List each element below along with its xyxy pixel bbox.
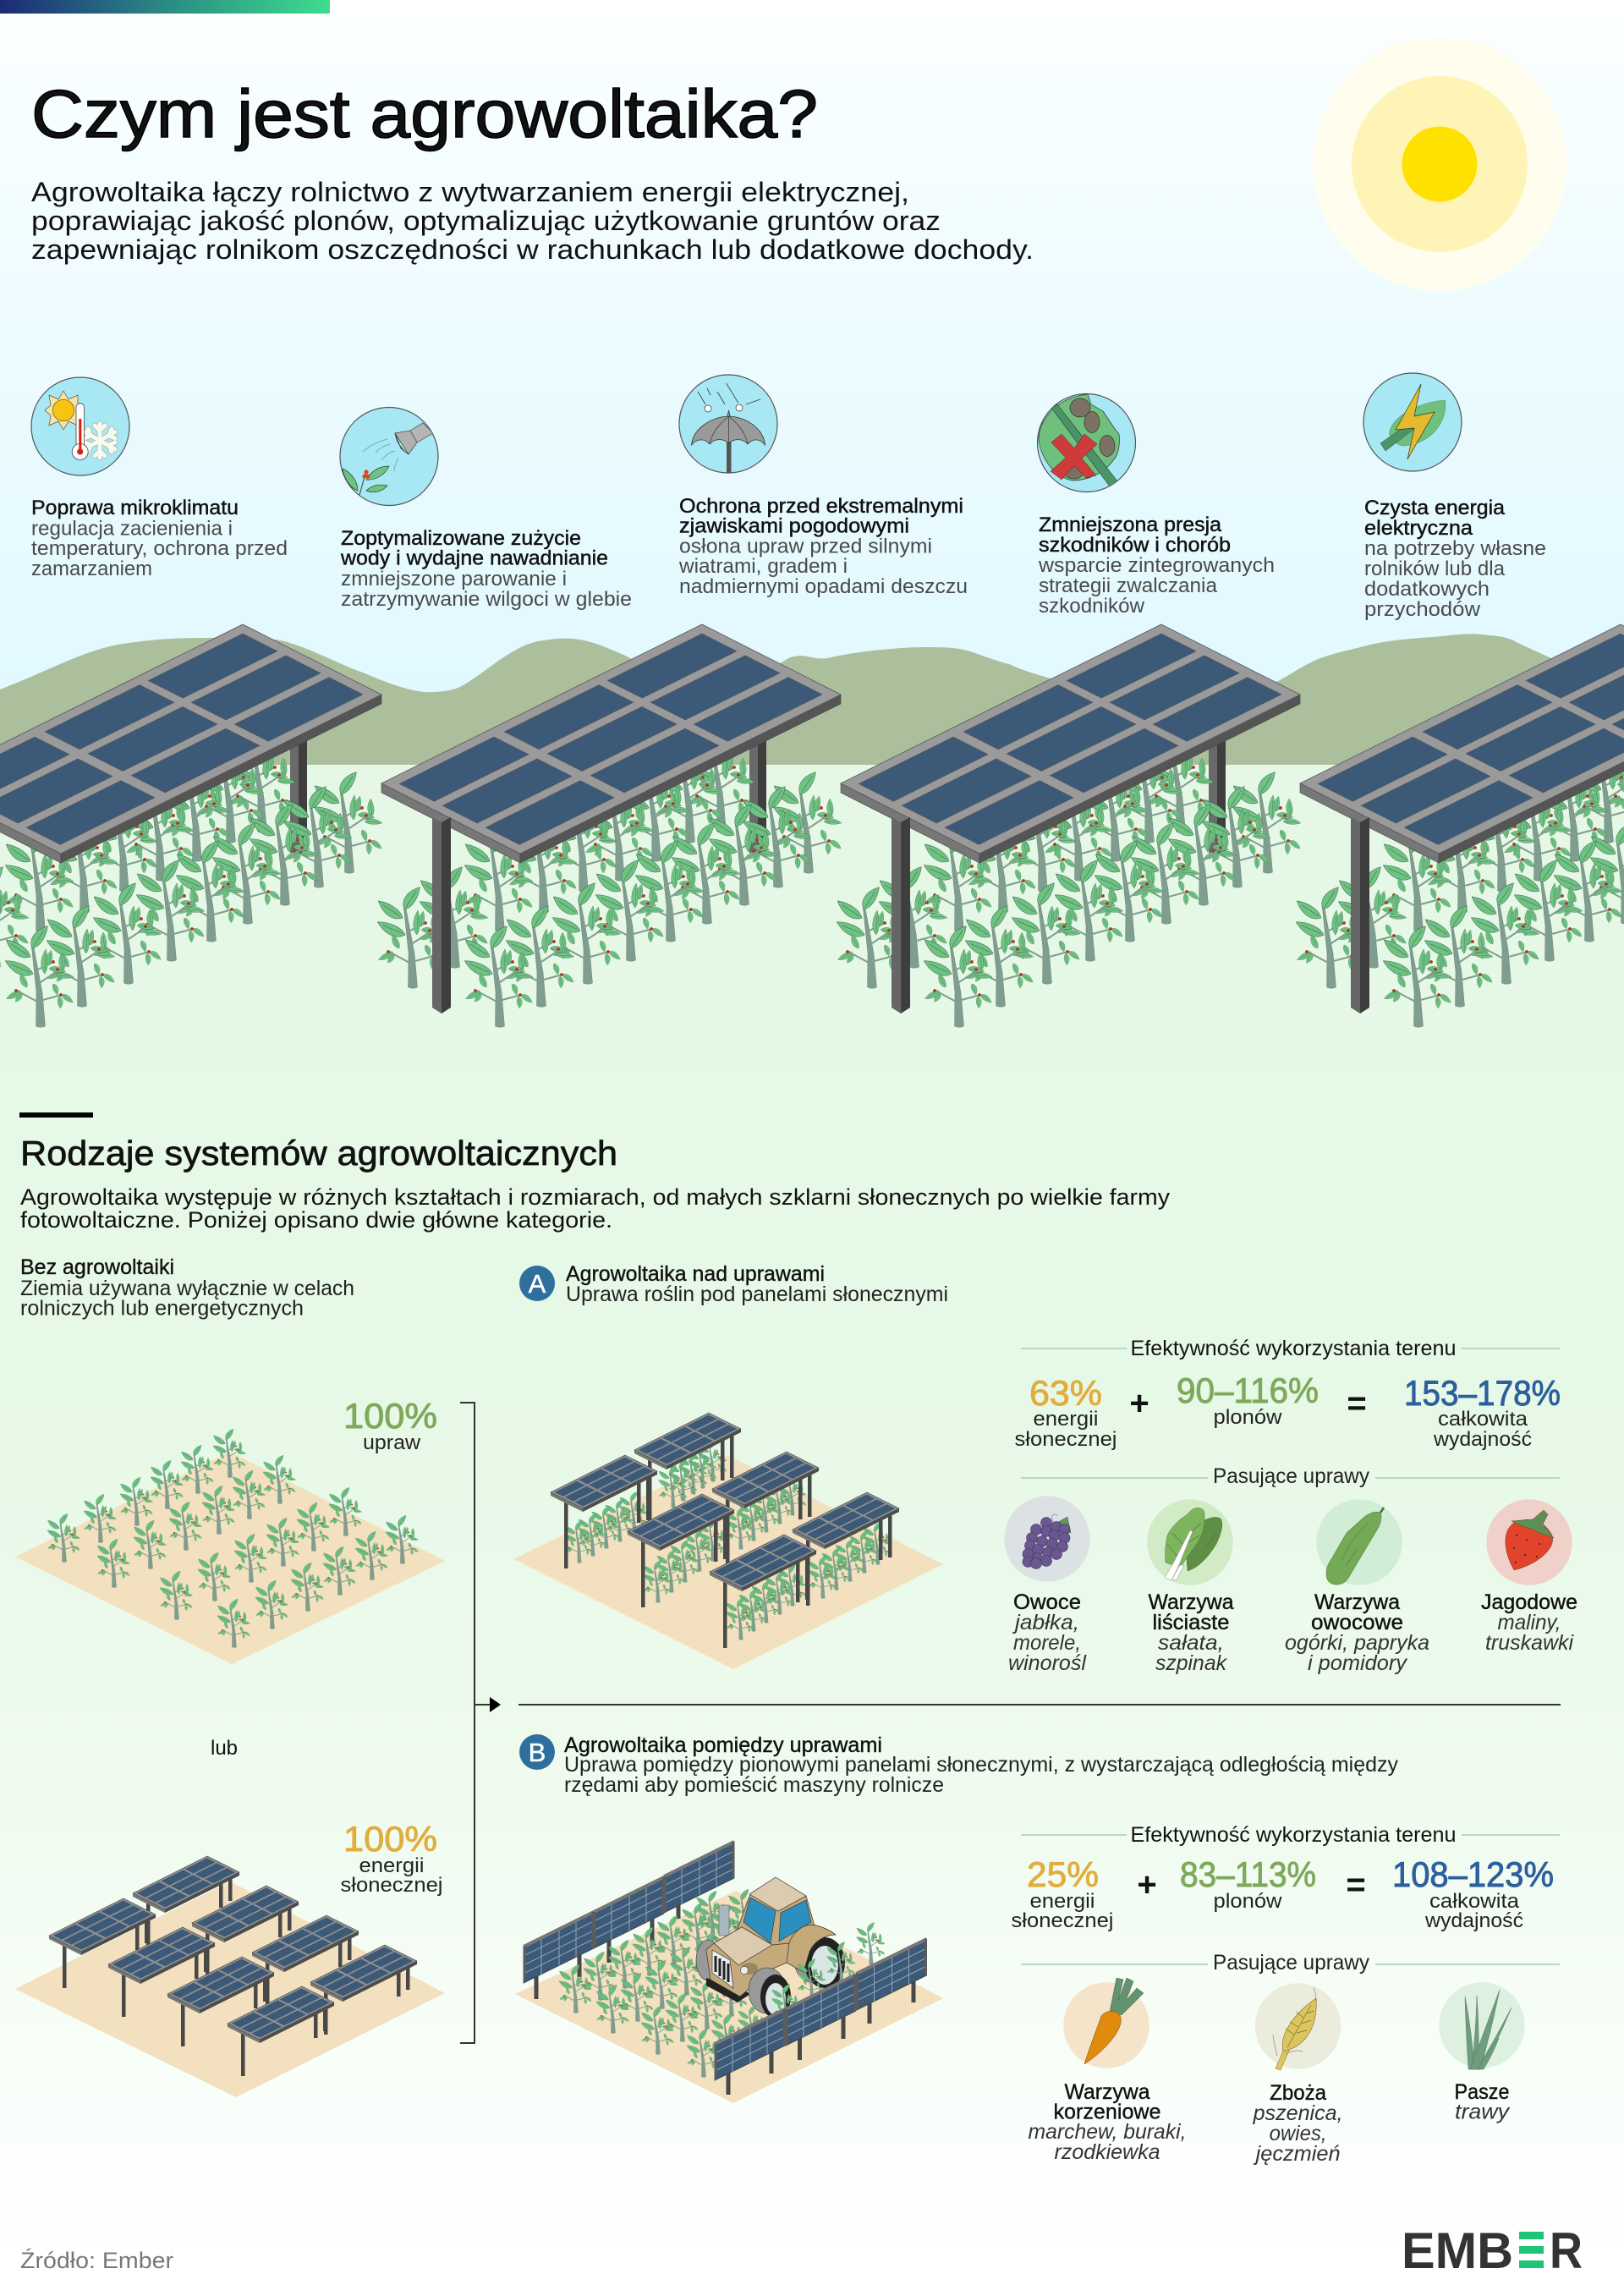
efficiency A: słonecznej [1015,1428,1116,1451]
text: microclimate [31,497,288,580]
text: irrigation: Zoptymalizowane zużycie [341,527,581,550]
crop rows behind tractor [557,1887,761,2055]
crop label: berries: maliny, [1497,1611,1561,1634]
crop label: forage: Pasze [1455,2080,1509,2104]
suitable crops heading B: Pasujące uprawy [1213,1951,1369,1975]
text: pests: strategii zwalczania [1039,574,1218,597]
efficiency B: + [1137,1866,1157,1903]
crop label: fruit: winorośl [1008,1651,1087,1675]
field: crops only [15,1427,445,1664]
source: Źródło: Ember [20,2248,173,2273]
crop label: cereals: pszenica, [1253,2101,1343,2125]
crop rows in front of tractor [685,1921,886,2078]
label: 100% solar [340,1819,443,1897]
text: clean energy: dodatkowych [1364,578,1490,601]
label: 100% solar: 100% [343,1819,437,1859]
field: solar only [15,1856,445,2097]
efficiency B: = [1346,1866,1366,1903]
crop label: forage [1455,2080,1511,2123]
hills [0,634,1624,766]
crop label: leafy vegetables: szpinak [1155,1651,1227,1675]
tractor [696,1877,845,2019]
efficiency B [1012,1823,1560,1932]
label: or: lub [211,1737,238,1760]
section heading: Rodzaje systemów agrowoltaicznych [20,1134,617,1173]
suitable crops heading A: Pasujące uprawy [1213,1464,1369,1488]
without agrivoltaics heading: Bez agrowoltaiki [20,1255,174,1279]
text: clean energy: elektryczna [1364,517,1473,540]
crop: fruit [1004,1496,1090,1582]
divider between A and B [518,1704,1561,1706]
efficiency A: 63% [1029,1373,1102,1413]
heading A: Uprawa roślin pod panelami słonecznymi [566,1283,948,1306]
crop label: berries: Jagodowe [1481,1590,1577,1614]
icon: clean energy [1363,373,1462,471]
efficiency A: 90–116% [1177,1370,1319,1410]
text: irrigation: zmniejszone parowanie i [341,568,567,590]
efficiency A: wydajność [1433,1428,1532,1451]
crop label: root vegetables: korzeniowe [1054,2100,1160,2123]
section intro: Agrowoltaika występuje w różnych kształtach i rozmiarach, od małych szklarni słonecznych po wielkie farmy [20,1184,1171,1210]
crop: fruit vegetables [1316,1499,1402,1585]
background: ground [0,765,1624,2296]
without agrivoltaics heading: rolniczych lub energetycznych [20,1296,304,1320]
efficiency B: 108–123% [1392,1854,1554,1894]
crop label: fruit: morele, [1013,1631,1081,1655]
sun [1313,37,1566,291]
efficiency B: słonecznej [1012,1909,1113,1932]
text: pests [1038,514,1275,618]
crop label: cereals: Zboża [1270,2081,1326,2105]
text: weather: nadmiernymi opadami deszczu [679,575,968,598]
text: weather [678,495,968,598]
efficiency A: całkowita [1438,1408,1528,1431]
text: pests: szkodników [1039,595,1145,618]
efficiency B: 83–113% [1180,1854,1316,1894]
crop label: cereals: owies, [1270,2122,1327,2145]
crop label: leafy vegetables: Warzywa [1149,1590,1234,1614]
crop label: leafy vegetables: liściaste [1152,1611,1230,1634]
crop label: berries [1481,1590,1577,1655]
crop: root vegetables [1063,1978,1149,2068]
section intro [20,1184,1171,1233]
scene B: vertical panels and tractor [515,1842,943,2103]
efficiency A: + [1129,1385,1149,1422]
crop: berries [1486,1499,1572,1585]
crop label: forage: trawy [1455,2100,1511,2123]
crop label: fruit vegetables: owocowe [1311,1611,1403,1634]
without agrivoltaics heading [20,1255,354,1320]
crop label: fruit [1008,1590,1087,1675]
badge A [519,1266,555,1301]
heading B [564,1733,1398,1797]
agrivoltaic array: panel 2 with crops [375,624,842,1027]
crop label: leafy vegetables: sałata, [1158,1631,1224,1655]
icon: pests [1037,394,1135,492]
badge B [519,1734,555,1770]
crop: leafy vegetables [1147,1499,1233,1585]
crop label: root vegetables: Warzywa [1064,2080,1150,2104]
label: 100% solar: słonecznej [340,1874,443,1897]
text: microclimate: Poprawa mikroklimatu [31,497,239,519]
crop: forage [1439,1982,1525,2069]
heading B: Uprawa pomiędzy pionowymi panelami słonecznymi, z wystarczającą odległością między [564,1753,1398,1777]
crop label: root vegetables: marchew, buraki, [1029,2120,1186,2144]
text: irrigation: wody i wydajne nawadnianie [340,547,608,570]
efficiency A: energii [1034,1408,1098,1431]
intro text [31,177,1034,265]
text: weather: zjawiskami pogodowymi [679,514,909,538]
logo: Ember [1402,2222,1583,2279]
heading A [566,1262,948,1306]
efficiency B: energii [1030,1890,1095,1913]
efficiency B: plonów [1213,1890,1282,1913]
crop label: fruit: Owoce [1013,1590,1081,1614]
heading B: rzędami aby pomieścić maszyny rolnicze [564,1773,944,1797]
crop label: root vegetables [1029,2080,1186,2164]
crop label: fruit vegetables: Warzywa [1314,1590,1400,1614]
text: microclimate: regulacja zacienienia i [31,518,233,540]
agrivoltaic array: panel 1 with crops [0,624,383,1027]
efficiency B: wydajność [1424,1909,1523,1932]
front panel row [715,1939,927,2095]
background: sky [0,0,1624,766]
crop label: fruit vegetables [1285,1590,1429,1675]
crop label: cereals [1253,2081,1343,2166]
crop: cereals [1255,1983,1341,2070]
intro text: Agrowoltaika łączy rolnictwo z wytwarzaniem energii elektrycznej, [31,177,909,207]
crop label: fruit vegetables: ogórki, papryka [1285,1631,1429,1655]
without agrivoltaics heading: Ziemia używana wyłącznie w celach [20,1277,354,1300]
label: 100% crops: 100% [343,1396,437,1436]
label: 100% crops [343,1396,437,1454]
intro text: zapewniając rolnikom oszczędności w rachunkach lub dodatkowe dochody. [31,234,1034,265]
text: clean energy: Czysta energia [1364,497,1506,519]
icon: irrigation [340,408,438,506]
section divider bar [19,1112,93,1118]
heading B: Agrowoltaika pomiędzy uprawami [564,1733,882,1757]
scene A: crops under panels [513,1413,943,1669]
efficiency B: całkowita [1429,1890,1520,1913]
efficiency A: = [1347,1385,1367,1422]
efficiency A: Efektywność wykorzystania terenu [1130,1337,1457,1360]
badge B: B [529,1738,546,1767]
logo: Ember: EMB [1402,2222,1513,2279]
text: weather: osłona upraw przed silnymi [679,535,932,558]
crop label: leafy vegetables [1149,1590,1234,1675]
agrivoltaic array: panel 3 with crops [834,624,1302,1027]
intro text: poprawiając jakość plonów, optymalizując użytkowanie gruntów oraz [31,206,941,236]
title: Czym jest agrowoltaika? [31,76,818,151]
text: clean energy: na potrzeby własne [1364,537,1546,560]
crop label: fruit: jabłka, [1012,1611,1079,1634]
section intro: fotowoltaiczne. Poniżej opisano dwie główne kategorie. [20,1207,612,1233]
text: microclimate: temperatury, ochrona przed [31,537,288,560]
crop label: berries: truskawki [1485,1631,1574,1655]
heading A: Agrowoltaika nad uprawami [566,1262,825,1286]
efficiency A: 153–178% [1404,1373,1561,1413]
label: 100% crops: upraw [363,1431,421,1454]
text: weather: wiatrami, gradem i [678,555,848,578]
text: irrigation [340,527,632,611]
text: pests: szkodników i chorób [1039,534,1231,557]
bracket and arrow [460,1403,501,2043]
top gradient bar [0,0,330,14]
text: clean energy: przychodów [1364,598,1481,621]
text: pests: Zmniejszona presja [1039,514,1222,536]
text: pests: wsparcie zintegrowanych [1038,554,1275,577]
text: irrigation: zatrzymywanie wilgoci w glebie [341,588,632,611]
back panel row [524,1842,734,1999]
label: 100% solar: energii [359,1854,425,1877]
crop label: fruit vegetables: i pomidory [1308,1651,1408,1675]
text: microclimate: zamarzaniem [31,558,152,580]
text: clean energy: rolników lub dla [1364,558,1506,580]
text: clean energy [1364,497,1546,621]
efficiency B: Efektywność wykorzystania terenu [1130,1823,1457,1847]
efficiency B: 25% [1027,1854,1099,1894]
crop label: cereals: jęczmień [1254,2142,1341,2166]
agrivoltaic array: panel 4 with crops [1293,624,1624,1027]
efficiency A [1015,1337,1561,1451]
icon: umbrella [679,375,777,473]
badge A: A [529,1269,546,1299]
logo: Ember: R [1550,2222,1583,2279]
icon: microclimate [31,377,129,475]
text: weather: Ochrona przed ekstremalnymi [679,495,963,518]
crop label: root vegetables: rzodkiewka [1054,2140,1160,2164]
efficiency A: plonów [1213,1406,1282,1429]
